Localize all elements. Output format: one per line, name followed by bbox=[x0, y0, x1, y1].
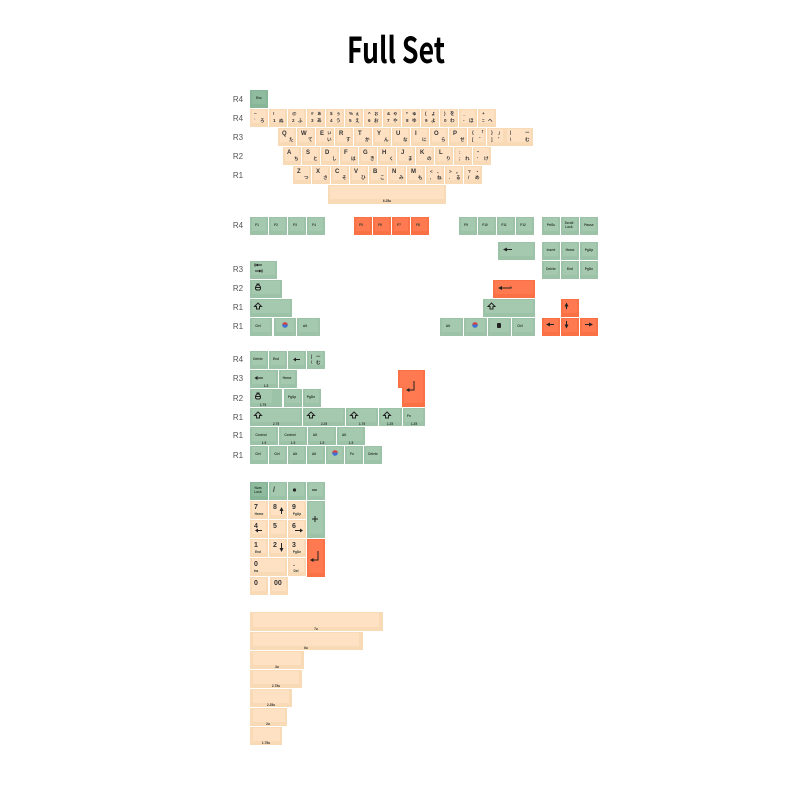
alpha block: number row: _ bbox=[462, 111, 466, 116]
system keys: PrtSc, Scroll Lock, Pause: Pause bbox=[584, 223, 594, 227]
alternate keys row: caps 1.75u, PgUp, PgDn: PgDn bbox=[307, 395, 315, 399]
function keys F5-F8: F7 bbox=[397, 223, 401, 227]
alpha block: number row: ゃ bbox=[393, 111, 398, 117]
key: Esc bbox=[250, 90, 268, 108]
alpha block: ZXCV row: め bbox=[475, 175, 480, 181]
row labels: block 2: R2 bbox=[233, 284, 244, 293]
alternate keys row: backspace 1.5u, Home: 1.5 bbox=[264, 384, 268, 388]
alternate keys row: caps 1.75u, PgUp, PgDn bbox=[250, 389, 321, 407]
alpha block: QWERTY row: [ bbox=[472, 137, 474, 142]
row labels: block 2 bbox=[233, 221, 244, 331]
bottom right modifiers: Alt, Win, Menu, Ctrl: Alt bbox=[446, 324, 451, 328]
function keys F1-F4 bbox=[250, 217, 325, 235]
alpha block: number row: $ bbox=[330, 111, 333, 116]
alternate shift row bbox=[250, 408, 425, 426]
function keys F9-F12: F9 bbox=[464, 223, 468, 227]
alpha block: ZXCV row: Z bbox=[297, 169, 301, 175]
alpha block: number row: % bbox=[349, 111, 353, 116]
alpha block: number row: を bbox=[450, 110, 455, 116]
numpad digits: 7 bbox=[254, 504, 258, 511]
alpha block: ZXCV row: C bbox=[335, 169, 340, 175]
alpha block: number row bbox=[250, 109, 496, 127]
alpha block: ASDF row: し bbox=[332, 156, 337, 161]
function keys F1-F4: F1 bbox=[255, 223, 259, 227]
alpha block: QWERTY row: な bbox=[403, 136, 408, 142]
alpha block: ASDF row: G bbox=[363, 150, 368, 156]
numpad digits: 4 bbox=[254, 523, 258, 530]
alpha block: number row: ^ bbox=[368, 111, 371, 116]
system keys: PrtSc, Scroll Lock, Pause: Lock bbox=[565, 225, 573, 229]
row labels: block 1: R3 bbox=[233, 133, 244, 142]
spacebar 6u: 6u bbox=[304, 646, 308, 650]
alternate shift row: Fn bbox=[407, 414, 411, 418]
alpha block: ZXCV row: X bbox=[316, 169, 320, 175]
alternate bottom row: Delete bbox=[368, 452, 378, 456]
alpha block: ZXCV row: 、 bbox=[437, 169, 442, 174]
alpha block: ZXCV row: V bbox=[354, 169, 358, 175]
alpha block: number row: あ bbox=[317, 117, 322, 124]
system keys: PrtSc, Scroll Lock, Pause: Scroll bbox=[565, 221, 574, 225]
numpad digits: 0 bbox=[254, 580, 258, 587]
key: left shift 2.25u bbox=[250, 299, 292, 317]
alpha block: ASDF row: D bbox=[325, 150, 330, 156]
key: right shift bbox=[483, 299, 535, 317]
alpha block: number row: = bbox=[482, 118, 485, 123]
alpha block: number row: へ bbox=[488, 118, 493, 123]
alternate keys row: backspace 1.5u, Home bbox=[250, 370, 297, 388]
key: spacebar 6.25u bbox=[328, 185, 446, 204]
alpha block: QWERTY row: か bbox=[365, 136, 370, 143]
system keys: PrtSc, Scroll Lock, Pause: PrtSc bbox=[547, 223, 555, 227]
spacebar 7u: 7u bbox=[314, 627, 318, 631]
alpha block: ZXCV row: < bbox=[430, 169, 433, 174]
row labels: block 1 bbox=[233, 95, 244, 180]
alternate modifiers row: Control, Control, Alt, Alt: Alt bbox=[342, 433, 347, 437]
alpha block: ZXCV row: ね bbox=[437, 175, 442, 181]
arrow keys bbox=[542, 299, 598, 336]
alpha block: ASDF row: A bbox=[287, 150, 292, 156]
navigation cluster: PgUp bbox=[585, 248, 593, 252]
numpad digits: 8 bbox=[273, 504, 277, 511]
key: backspace 2u bbox=[498, 242, 535, 260]
alpha block: ZXCV row: ・ bbox=[475, 169, 480, 174]
alpha block: QWERTY row: O bbox=[434, 131, 439, 137]
alpha block: QWERTY row: I bbox=[415, 131, 417, 137]
navigation cluster: Delete bbox=[546, 267, 556, 271]
alternate modifiers row: Control, Control, Alt, Alt bbox=[250, 427, 365, 445]
alpha block: number row: 7 bbox=[387, 118, 390, 123]
numpad enter key bbox=[307, 539, 325, 577]
spacebar 3u: 3u bbox=[275, 665, 279, 669]
function keys F5-F8: F6 bbox=[378, 223, 382, 227]
alpha block: QWERTY row: い bbox=[327, 137, 332, 142]
alpha block: number row: 6 bbox=[368, 118, 371, 123]
alpha block: ASDF row: れ bbox=[465, 156, 470, 161]
alpha block: number row: @ bbox=[292, 111, 297, 116]
alpha block: number row: 0 bbox=[444, 118, 447, 123]
alpha block: number row: ゆ bbox=[412, 117, 417, 124]
row labels: block 3: R1 bbox=[233, 451, 244, 460]
numpad digits: PgDn bbox=[293, 550, 301, 554]
alpha block: number row: ろ bbox=[260, 118, 265, 124]
function keys F9-F12: F10 bbox=[482, 223, 488, 227]
alpha block: ZXCV row: > bbox=[449, 169, 452, 174]
alpha block: ZXCV row: こ bbox=[380, 175, 385, 180]
spacebar 1.75u: 1.75u bbox=[262, 741, 270, 745]
navigation cluster: Insert bbox=[547, 248, 556, 252]
alpha block: ZXCV row: / bbox=[468, 175, 470, 180]
alternate modifiers row: Control, Control, Alt, Alt: 1.5 bbox=[291, 441, 295, 445]
alpha block: number row: * bbox=[406, 111, 408, 116]
row labels: block 3: R4 bbox=[233, 355, 244, 364]
alpha block: number row: え bbox=[355, 118, 360, 124]
spacebar 2u: 2u bbox=[266, 722, 270, 726]
alpha block: ASDF row: ; bbox=[459, 156, 461, 161]
alpha block: ASDF row: は bbox=[351, 156, 356, 162]
alternate modifiers row: Control, Control, Alt, Alt: Control bbox=[255, 433, 267, 437]
bottom left modifiers: Ctrl, Win, Alt: Ctrl bbox=[255, 324, 261, 328]
alpha block: ZXCV row: . bbox=[449, 175, 450, 180]
alpha block: number row: ゅ bbox=[412, 111, 417, 117]
function keys F5-F8 bbox=[354, 217, 429, 235]
alpha block: QWERTY row: | bbox=[510, 130, 511, 135]
alpha block: ASDF row: F bbox=[344, 150, 348, 156]
alpha block: number row: ぉ bbox=[374, 111, 379, 116]
alpha block: ASDF row: き bbox=[370, 155, 375, 161]
alpha block: QWERTY row: P bbox=[453, 131, 457, 137]
alpha block: number row: ( bbox=[425, 111, 427, 116]
spacebar 2.25u: 2.25u bbox=[267, 703, 275, 707]
alpha block: ZXCV row: み bbox=[399, 175, 404, 181]
alpha block: QWERTY row: T bbox=[358, 131, 362, 137]
alpha block: number row: 5 bbox=[349, 118, 352, 123]
alpha block: QWERTY row: ん bbox=[384, 137, 389, 143]
alpha block: number row: 8 bbox=[406, 118, 409, 123]
alpha block: QWERTY row: す bbox=[346, 136, 351, 143]
alpha block: QWERTY row: R bbox=[339, 131, 344, 137]
row labels: block 1: R1 bbox=[233, 171, 244, 180]
row labels: block 3: R1 bbox=[233, 413, 244, 422]
alpha block: QWERTY row: ー bbox=[525, 130, 530, 135]
alternate keys row: caps 1.75u, PgUp, PgDn: 1.75 bbox=[260, 403, 266, 407]
alpha block: ASDF row: ま bbox=[408, 155, 413, 161]
alpha block: number row: や bbox=[393, 117, 398, 124]
alternate shift row: 1.75 bbox=[359, 422, 365, 426]
alternate keys row: Delete, End, backspace, pipe: む bbox=[316, 359, 321, 366]
spacebar 2.75u: 2.75u bbox=[272, 684, 280, 688]
alpha block: ASDF row: り bbox=[446, 156, 451, 162]
alpha block: QWERTY row: } bbox=[491, 130, 493, 135]
alpha block: number row: 9 bbox=[425, 118, 428, 123]
alpha block: ASDF row: S bbox=[306, 150, 310, 156]
numpad digits: 3 bbox=[292, 542, 296, 549]
alpha block: ZXCV row: B bbox=[373, 169, 378, 175]
row labels: block 3 bbox=[233, 355, 244, 460]
alternate keys row: Delete, End, backspace, pipe: End bbox=[273, 357, 279, 361]
numpad digits: 9 bbox=[292, 504, 296, 511]
row labels: block 3: R2 bbox=[233, 394, 244, 403]
alternate shift row: 2.25 bbox=[321, 422, 327, 426]
function keys F9-F12: F12 bbox=[520, 223, 526, 227]
alpha block: ASDF row: ' bbox=[477, 156, 478, 161]
alpha block: QWERTY row: 「 bbox=[479, 130, 484, 135]
numpad digits: Home bbox=[255, 512, 264, 516]
alpha block: ASDF row: ち bbox=[294, 155, 299, 162]
alpha block: QWERTY row: 」 bbox=[498, 130, 503, 135]
numpad digits: 6 bbox=[292, 523, 296, 530]
alternate modifiers row: Control, Control, Alt, Alt: 1.5 bbox=[262, 441, 266, 445]
alternate modifiers row: Control, Control, Alt, Alt: Control bbox=[284, 433, 296, 437]
alpha block: ASDF row: の bbox=[427, 156, 432, 162]
alternate modifiers row: Control, Control, Alt, Alt: 1.5 bbox=[349, 441, 353, 445]
bottom right modifiers: Alt, Win, Menu, Ctrl: Ctrl bbox=[517, 324, 523, 328]
alpha block: number row: ぇ bbox=[355, 111, 360, 117]
alternate bottom row: Fn bbox=[350, 452, 354, 456]
long spacebars bbox=[250, 612, 383, 745]
alpha block: number row: 3 bbox=[311, 118, 314, 123]
numpad digits bbox=[250, 501, 306, 595]
alpha block: ASDF row: く bbox=[389, 156, 394, 161]
alpha block: ASDF row: H bbox=[382, 150, 386, 156]
alpha block: ASDF row: K bbox=[420, 150, 425, 156]
alpha block: QWERTY row: \ bbox=[510, 137, 512, 142]
alpha block: QWERTY row: せ bbox=[460, 137, 465, 142]
navigation cluster: Home bbox=[566, 248, 575, 252]
row labels: block 1: R4 bbox=[233, 95, 244, 104]
alpha block: QWERTY row: ] bbox=[491, 137, 493, 142]
key: enter orange bbox=[493, 280, 535, 298]
alternate keys row: backspace 1.5u, Home: Home bbox=[283, 376, 292, 380]
alpha block: ZXCV row: 。 bbox=[456, 169, 461, 174]
navigation cluster bbox=[542, 242, 598, 279]
alternate keys row: Delete, End, backspace, pipe: Delete bbox=[253, 357, 263, 361]
row labels: block 2: R1 bbox=[233, 303, 244, 312]
row labels: block 2: R1 bbox=[233, 322, 244, 331]
alpha block: ASDF row: L bbox=[439, 150, 443, 156]
key: spacebar 6.25u: 6.25u bbox=[383, 199, 391, 203]
numpad digits: PgUp bbox=[293, 512, 301, 516]
numpad top row: Num bbox=[254, 486, 262, 490]
navigation cluster: PgDn bbox=[585, 267, 593, 271]
alternate bottom row: Alt bbox=[312, 452, 317, 456]
function keys F9-F12: F11 bbox=[501, 223, 507, 227]
alternate keys row: Delete, End, backspace, pipe: ー bbox=[316, 354, 321, 359]
alternate shift row: 2.75 bbox=[273, 422, 279, 426]
alpha block: number row: ふ bbox=[298, 118, 303, 123]
alpha block: number row: 4 bbox=[330, 118, 333, 123]
alpha block: number row: お bbox=[374, 117, 379, 123]
alpha block: QWERTY row: Y bbox=[377, 131, 381, 137]
alpha block: ZXCV row bbox=[293, 166, 482, 184]
row labels: block 1: R4 bbox=[233, 114, 244, 123]
alternate shift row: 1.25 bbox=[411, 422, 417, 426]
numpad digits: 0 bbox=[254, 561, 258, 568]
alpha block: ASDF row: け bbox=[484, 156, 489, 162]
alpha block: ZXCV row: M bbox=[411, 169, 416, 175]
alpha block: QWERTY row: ゛ bbox=[479, 137, 484, 142]
system keys: PrtSc, Scroll Lock, Pause bbox=[542, 217, 598, 235]
alpha block: number row: ) bbox=[444, 111, 446, 116]
alpha block: number row: ぬ bbox=[279, 118, 284, 123]
alternate keys row: caps 1.75u, PgUp, PgDn: PgUp bbox=[288, 395, 296, 399]
alpha block: ZXCV row: , bbox=[430, 175, 431, 180]
row labels: block 2: R3 bbox=[233, 265, 244, 274]
key: Esc: Esc bbox=[256, 96, 262, 100]
alpha block: QWERTY row: W bbox=[301, 131, 307, 137]
alpha block: ASDF row: " bbox=[477, 150, 479, 155]
function keys F5-F8: F8 bbox=[416, 223, 420, 227]
alternate bottom row: Ctrl bbox=[255, 452, 261, 456]
numpad digits: Ins bbox=[254, 569, 259, 573]
alpha block: QWERTY row: U bbox=[396, 131, 400, 137]
numpad bbox=[250, 482, 325, 595]
alpha block: ASDF row: J bbox=[401, 150, 404, 156]
alpha block: number row: ~ bbox=[254, 111, 257, 116]
alpha block: ASDF row: : bbox=[459, 150, 461, 155]
alternate bottom row: Ctrl bbox=[274, 452, 280, 456]
alternate keys row: Delete, End, backspace, pipe bbox=[250, 351, 325, 369]
alpha block: QWERTY row: ぃ bbox=[327, 130, 332, 135]
alpha block: number row: ほ bbox=[469, 117, 474, 124]
alpha block: number row: 2 bbox=[292, 118, 295, 123]
numpad digits: Del bbox=[294, 569, 299, 573]
alpha block: ZXCV row: る bbox=[456, 175, 461, 180]
alpha block: QWERTY row: む bbox=[525, 136, 530, 143]
function keys F9-F12 bbox=[459, 217, 534, 235]
numpad digits: 1 bbox=[254, 542, 258, 549]
alpha block: ZXCV row: N bbox=[392, 169, 396, 175]
numpad digits: . bbox=[293, 561, 295, 568]
alternate modifiers row: Control, Control, Alt, Alt: Alt bbox=[313, 433, 318, 437]
alpha block: ZXCV row: ひ bbox=[361, 175, 366, 180]
alpha block: QWERTY row: ら bbox=[441, 136, 446, 143]
title: Full Set bbox=[347, 23, 445, 74]
alternate keys row: Delete, End, backspace, pipe: \ bbox=[311, 360, 313, 365]
alternate keys row: Delete, End, backspace, pipe: | bbox=[311, 354, 312, 359]
alpha block: QWERTY row: て bbox=[308, 137, 313, 142]
alternate modifiers row: Control, Control, Alt, Alt: 1.5 bbox=[320, 441, 324, 445]
alpha block: number row: + bbox=[482, 111, 485, 116]
alternate bottom row: Alt bbox=[293, 452, 298, 456]
alpha block: QWERTY row: た bbox=[289, 136, 294, 143]
key: tab 1.5u bbox=[250, 261, 277, 279]
numpad digits: End bbox=[255, 550, 261, 554]
alpha block: ZXCV row: さ bbox=[323, 174, 328, 180]
bottom left modifiers: Ctrl, Win, Alt bbox=[250, 318, 320, 336]
key: caps lock 1.75u bbox=[250, 280, 282, 298]
numpad digits: 00 bbox=[274, 580, 282, 587]
alpha block: number row: 1 bbox=[273, 118, 276, 123]
function keys F1-F4: F3 bbox=[293, 223, 297, 227]
alpha block: number row: & bbox=[387, 111, 391, 116]
alpha block: ZXCV row: つ bbox=[304, 175, 309, 180]
alpha block: number row: わ bbox=[450, 117, 455, 124]
bottom right modifiers: Alt, Win, Menu, Ctrl bbox=[440, 318, 535, 336]
alpha block: ASDF row bbox=[283, 147, 491, 165]
numpad top row: / bbox=[273, 487, 275, 494]
numpad plus key bbox=[307, 501, 325, 538]
numpad top row: Lock bbox=[254, 490, 262, 494]
row labels: block 3: R1 bbox=[233, 431, 244, 440]
alpha block: number row: ぁ bbox=[317, 111, 322, 117]
alpha block: QWERTY row: に bbox=[422, 137, 427, 142]
alpha block: ZXCV row: も bbox=[418, 174, 423, 180]
alpha block: ZXCV row: ? bbox=[468, 169, 471, 174]
alpha block: number row: う bbox=[336, 117, 341, 124]
function keys F5-F8: F5 bbox=[359, 223, 363, 227]
bottom left modifiers: Ctrl, Win, Alt: Alt bbox=[303, 324, 308, 328]
function keys F1-F4: F4 bbox=[312, 223, 316, 227]
alpha block: QWERTY row bbox=[278, 128, 533, 146]
numpad top row bbox=[250, 482, 325, 500]
alpha block: QWERTY row: { bbox=[472, 130, 474, 135]
function keys F1-F4: F2 bbox=[274, 223, 278, 227]
alternate shift row: 1.25 bbox=[387, 422, 393, 426]
alpha block: ZXCV row: そ bbox=[342, 175, 347, 181]
alpha block: QWERTY row: Q bbox=[282, 131, 287, 137]
alpha block: number row: ょ bbox=[431, 111, 436, 116]
key: ISO enter orange bbox=[398, 370, 425, 407]
row labels: block 3: R3 bbox=[233, 374, 244, 383]
navigation cluster: End bbox=[567, 267, 573, 271]
alpha block: number row: # bbox=[311, 111, 314, 116]
numpad digits: 2 bbox=[273, 542, 277, 549]
row labels: block 1: R2 bbox=[233, 152, 244, 161]
alpha block: number row: - bbox=[463, 118, 465, 123]
numpad digits: 5 bbox=[273, 523, 277, 530]
alternate bottom row bbox=[250, 446, 382, 464]
alpha block: QWERTY row: E bbox=[320, 131, 324, 137]
alpha block: number row: ` bbox=[254, 118, 256, 123]
alpha block: QWERTY row: ゜ bbox=[498, 137, 503, 142]
alpha block: ASDF row: と bbox=[313, 156, 318, 161]
alpha block: number row: ぅ bbox=[336, 111, 341, 117]
alpha block: number row: ! bbox=[273, 111, 275, 116]
row labels: block 2: R4 bbox=[233, 221, 244, 230]
alpha block: number row: よ bbox=[431, 117, 436, 123]
